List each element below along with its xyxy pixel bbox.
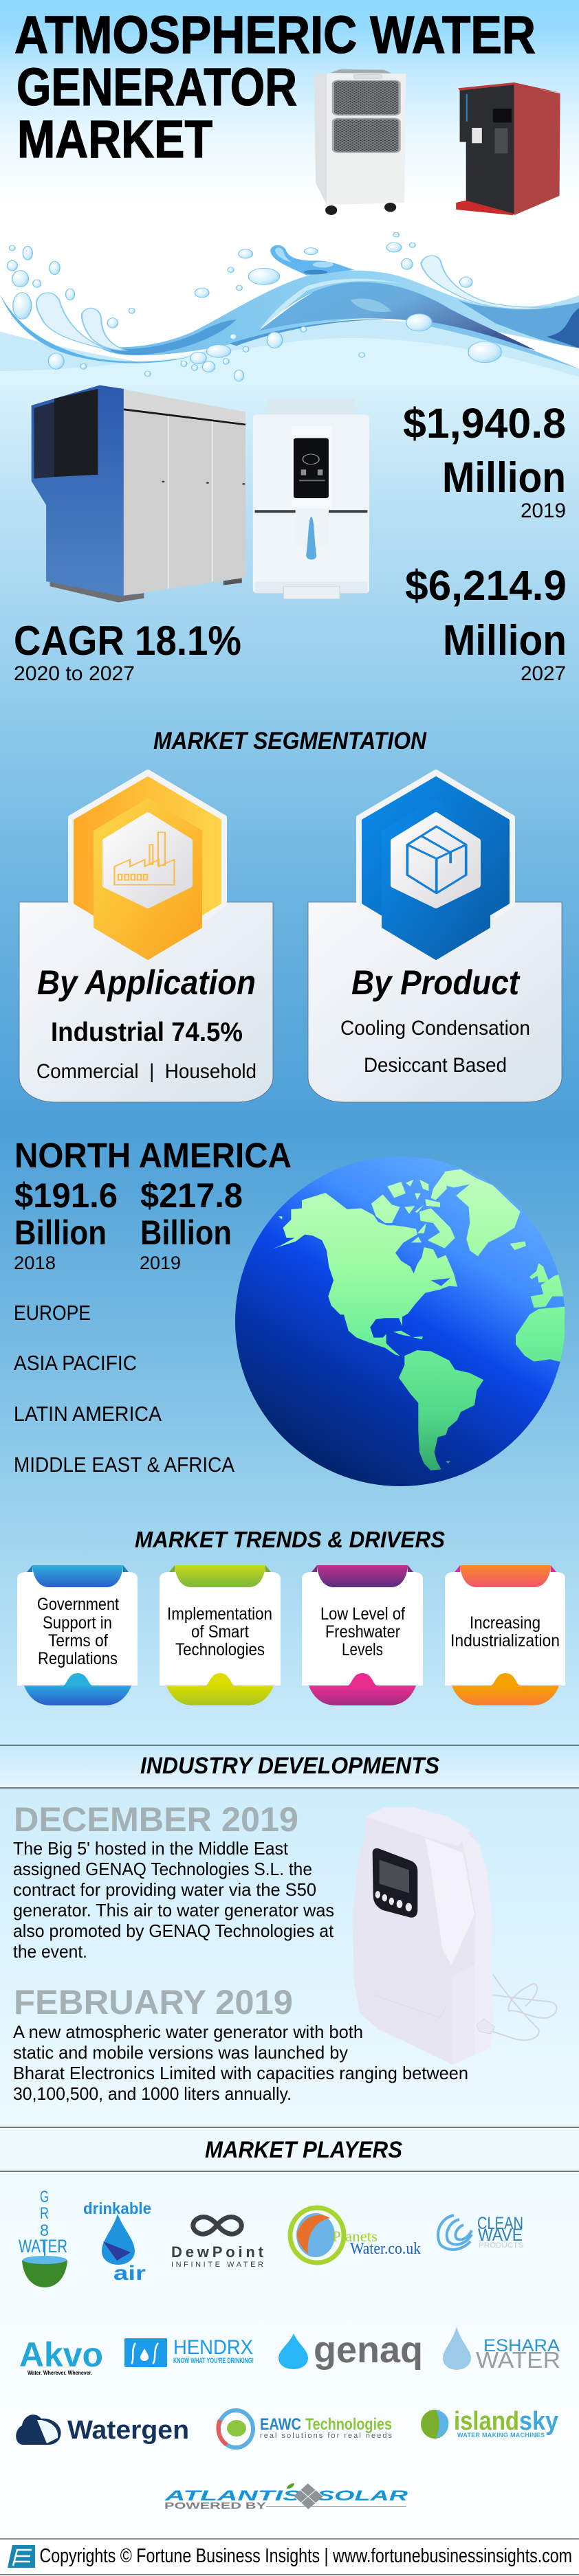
card: increasing industrialization: Industrialization [450,1631,560,1650]
region list: ASIA PACIFIC [14,1351,137,1375]
logo: Clean Wave: PRODUCTS [479,2241,523,2250]
logo: drinkable air: air [113,2262,146,2285]
logo: islandsky: sky [519,2407,558,2436]
regional stats: north america: 2018 [14,1253,56,1273]
development: december 2019 [13,1800,334,1962]
development: february 2019 [13,1983,468,2104]
card: government support: Support in [43,1613,112,1633]
logo: Clean Wave: WAVE [478,2226,523,2245]
heading band: industry developments: INDUSTRY DEVELOPMENTS [140,1753,439,1779]
product image: wall mounted generator [353,1807,557,2065]
globe illustration [235,1156,565,1486]
icon: blue hexagon badge with box [359,772,512,959]
logo: Clean Wave: CLEAN [477,2214,523,2233]
panel: by application: By Application [37,963,256,1002]
stat: 2019 market value: $1,940.8 [403,400,566,447]
logo: Watergen [16,2415,189,2445]
development: december 2019: also promoted by GENAQ Technologies at [13,1920,334,1941]
title [14,5,536,169]
logo: DewPoint [171,2217,264,2269]
stat: CAGR: 2020 to 2027 [14,662,135,685]
panel: by application [19,772,273,1102]
heading: market segmentation: MARKET SEGMENTATION [153,728,427,754]
logo: Eshara Water [443,2327,560,2373]
card: increasing industrialization [445,1565,565,1705]
logo: DewPoint: INFINITE WATER [171,2261,263,2269]
card: smart technologies: Technologies [175,1640,265,1659]
regional stats: north america: $191.6 [14,1176,118,1215]
title: GENERATOR [17,58,297,117]
region list: MIDDLE EAST & AFRICA [14,1453,234,1477]
card: smart technologies: Implementation [167,1604,272,1624]
stat: 2027 market value: 2027 [521,662,566,685]
development: february 2019: Bharat Electronics Limited with capacities ranging between [13,2063,468,2083]
logo: islandsky: WATER MAKING MACHINES [457,2432,545,2439]
stat: CAGR: CAGR 18.1% [14,618,241,664]
logo: Planets Water: Planets [332,2228,378,2245]
region list [14,1301,234,1477]
development: december 2019: DECEMBER 2019 [14,1800,298,1839]
logo: Akvo: Water. Wherever. Whenever. [28,2370,92,2376]
logo: Atlantis Solar: POWERED BY [164,2500,267,2511]
logo: GR8 Water: 8 [40,2221,49,2240]
stat: 2019 market value: 2019 [521,500,566,522]
regional stats: north america: NORTH AMERICA [14,1136,292,1175]
regional stats: north america [14,1136,292,1273]
card: government support: Government [37,1595,119,1614]
card: low freshwater [302,1565,423,1705]
stat: 2027 market value: Million [443,617,567,664]
product image: white smart unit [253,399,369,599]
logo: Hendrx [124,2336,254,2367]
logo: DewPoint: DewPoint [171,2243,264,2261]
panel: by product: Cooling Condensation [340,1017,530,1040]
development: december 2019: assigned GENAQ Technologies S.L. the [13,1859,312,1879]
panel: by application: Commercial | Household [36,1060,256,1083]
development: february 2019: A new atmospheric water generator with both [13,2021,363,2042]
logo: GR8 Water: R [40,2204,49,2223]
logo: Hendrx: HENDRX [173,2336,253,2359]
logo: Planets Water [290,2208,421,2263]
heading band: industry developments [0,1745,579,1788]
logo: Watergen: Watergen [67,2416,189,2445]
card: increasing industrialization: Increasing [470,1613,540,1633]
logo: Hendrx: KNOW WHAT YOU'RE DRINKING! [173,2357,254,2365]
logo: Atlantis Solar: ATLANTIS [164,2488,301,2504]
title: MARKET [17,110,212,169]
stat: CAGR [14,618,241,685]
logo: EAWC Technologies: real solutions for real needs [260,2432,392,2440]
card: government support: Terms of [48,1631,108,1650]
regional stats: north america: 2019 [140,1253,181,1273]
region list: LATIN AMERICA [14,1402,162,1426]
logo: Akvo: Akvo [19,2336,103,2374]
logo: GR8 Water: G [40,2188,49,2206]
card: smart technologies: of Smart [191,1622,249,1642]
development: december 2019: The Big 5' hosted in the Middle East [13,1838,289,1859]
logo: GR8 Water: WATER [19,2236,67,2256]
panel: by product [308,772,562,1102]
icon: orange hexagon badge with factory [71,772,224,959]
icon: Fortune Business Insights logo [8,2545,35,2568]
development: december 2019: contract for providing water via the S50 [13,1879,316,1900]
logo: Clean Wave [438,2214,523,2250]
logo: Genaq: genaq [314,2329,423,2371]
logo: EAWC Technologies: EAWC [260,2415,301,2434]
heading band: market players: MARKET PLAYERS [205,2137,402,2163]
stat: 2027 market value [405,562,567,685]
regional stats: north america: $217.8 [140,1176,243,1215]
development: december 2019: the event. [13,1941,87,1962]
development: february 2019: FEBRUARY 2019 [14,1983,293,2021]
product image: red water dispenser [456,82,560,215]
stat: 2019 market value [403,400,566,522]
panel: by product: Desiccant Based [364,1054,507,1077]
card: government support [17,1565,138,1705]
product image: blue cabinet generator [32,385,245,603]
logo: Eshara Water: ESHARA [483,2336,560,2355]
development: december 2019: generator. This air to water generator was [13,1900,334,1920]
logo: islandsky [421,2407,558,2439]
regional stats: north america: Billion [140,1213,232,1252]
logo: Atlantis Solar: SOLAR [317,2488,408,2504]
regional stats: north america: Billion [14,1213,107,1252]
logo: Eshara Water: WATER [476,2347,560,2373]
panel: by application: Industrial 74.5% [51,1018,243,1047]
card: low freshwater: Levels [342,1640,383,1659]
card: low freshwater: Freshwater [325,1622,400,1642]
development: february 2019: 30,100,500, and 1000 liters annually. [13,2083,292,2104]
logo: EAWC Technologies: Technologies [305,2415,392,2434]
heading: market trends and drivers: MARKET TRENDS & DRIVERS [135,1527,445,1552]
stat: 2027 market value: $6,214.9 [405,562,567,609]
panel: by product: By Product [351,963,521,1002]
region list: EUROPE [14,1301,91,1325]
development: february 2019: static and mobile versions was launched by [13,2042,348,2063]
logo: islandsky: island [454,2407,519,2436]
logo: EAWC Technologies [218,2410,392,2448]
card: low freshwater: Low Level of [320,1604,405,1624]
card: government support: Regulations [38,1649,118,1668]
logo: drinkable air [83,2199,151,2285]
card: smart technologies [160,1565,281,1705]
stat: 2019 market value: Million [442,454,566,502]
footer [0,2539,579,2576]
logo: Planets Water: Water.co.uk [350,2240,421,2258]
water wave splash illustration [0,232,579,385]
logo: Atlantis Solar [164,2483,408,2511]
product image: white air to water unit [314,69,406,215]
logo: drinkable air: drinkable [83,2199,151,2217]
logo: GR8 Water [19,2188,67,2287]
